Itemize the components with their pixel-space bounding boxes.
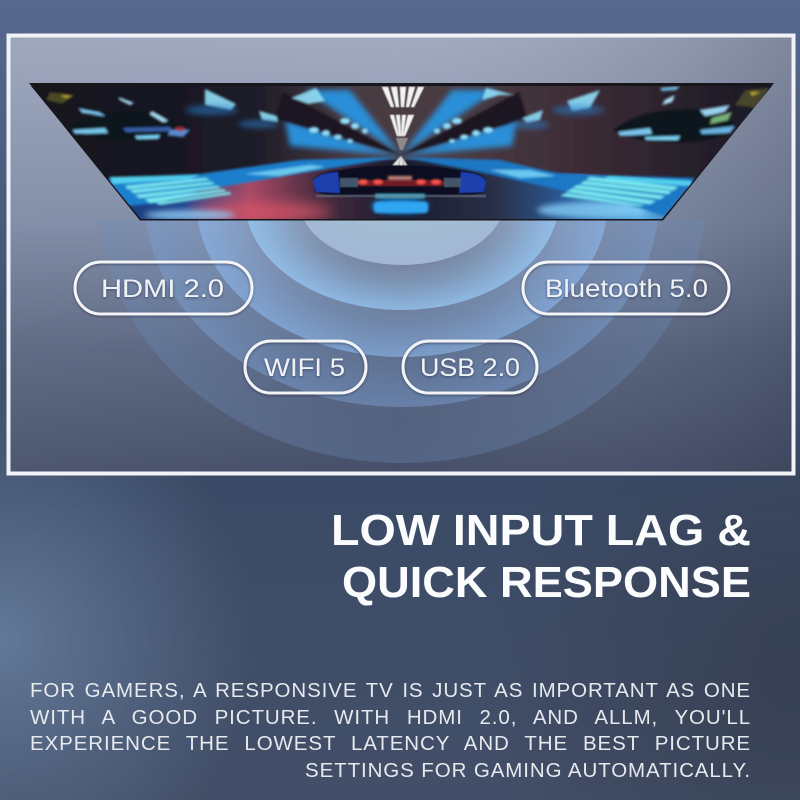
title: LOW INPUT LAG & <box>331 506 751 555</box>
pill: Bluetooth 5.0: Bluetooth 5.0 <box>545 275 708 303</box>
TV <box>29 83 774 222</box>
pill: Bluetooth 5.0 <box>523 262 729 314</box>
title: QUICK RESPONSE <box>342 558 751 607</box>
body text: WITH A GOOD PICTURE. WITH HDMI 2.0, AND ALLM, YOU'LL <box>30 706 751 729</box>
body text <box>30 679 751 782</box>
pill: USB 2.0: USB 2.0 <box>420 354 520 382</box>
central white light fans <box>382 87 424 168</box>
pill: HDMI 2.0: HDMI 2.0 <box>101 275 224 303</box>
pill: USB 2.0 <box>403 341 537 393</box>
tunnel light blobs <box>309 118 493 143</box>
left reflected car <box>46 92 190 141</box>
TV bezel <box>29 83 774 220</box>
body text: FOR GAMERS, A RESPONSIVE TV IS JUST AS IMPORTANT AS ONE <box>30 679 751 702</box>
title <box>331 506 751 607</box>
pill: HDMI 2.0 <box>75 262 252 314</box>
dark tunnel beams <box>275 92 527 155</box>
central race car <box>313 165 486 213</box>
floor <box>100 160 700 220</box>
left floor light strip <box>108 157 401 206</box>
framed panel <box>8 36 794 474</box>
right floor light strip <box>401 157 695 216</box>
body text: EXPERIENCE THE LOWEST LATENCY AND THE BEST PICTURE <box>30 732 751 755</box>
concentric signal arcs <box>104 220 704 463</box>
body text: SETTINGS FOR GAMING AUTOMATICALLY. <box>305 759 751 782</box>
tunnel light rays <box>285 90 517 156</box>
pill: WIFI 5 <box>245 341 366 393</box>
ceiling light panels <box>205 88 600 123</box>
pill: WIFI 5: WIFI 5 <box>264 354 345 382</box>
TV screen with racing scene <box>29 84 774 222</box>
right reflected car <box>613 86 770 142</box>
